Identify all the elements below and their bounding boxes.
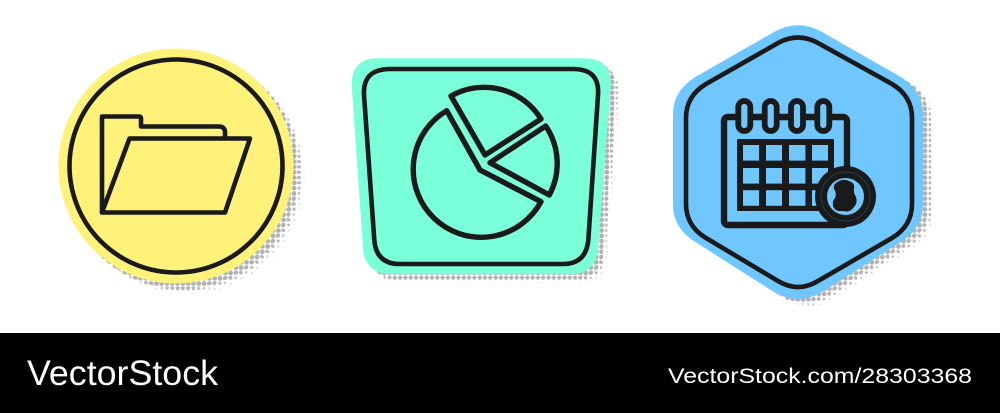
calendar body: [724, 117, 847, 225]
hexagon outline: [686, 38, 912, 287]
calendar grid: [737, 139, 834, 211]
icon: pie chart: [413, 87, 557, 237]
icon: calendar with coin: [724, 101, 876, 227]
panel: pie chart icon badge: [352, 58, 618, 284]
icon: folder: [102, 116, 250, 212]
trapezoid outline: [364, 69, 598, 264]
calendar binder rings: [738, 101, 829, 131]
blue hexagon: [673, 25, 923, 299]
panel: calendar icon badge: [673, 25, 931, 306]
halftone shadow: trapezoid: [376, 66, 618, 284]
coin: [815, 166, 876, 227]
teal trapezoid: [352, 58, 611, 274]
footer band: [0, 333, 1000, 413]
yellow circle: [58, 48, 294, 284]
halftone shadow: circle: [94, 81, 304, 294]
circle outline: [70, 60, 282, 272]
halftone shadow: hexagon: [701, 36, 931, 306]
logo text: VectorStock: [27, 354, 219, 393]
panel: folder icon badge: [58, 48, 304, 294]
image id text: VectorStock.com/28303368: [668, 363, 972, 388]
